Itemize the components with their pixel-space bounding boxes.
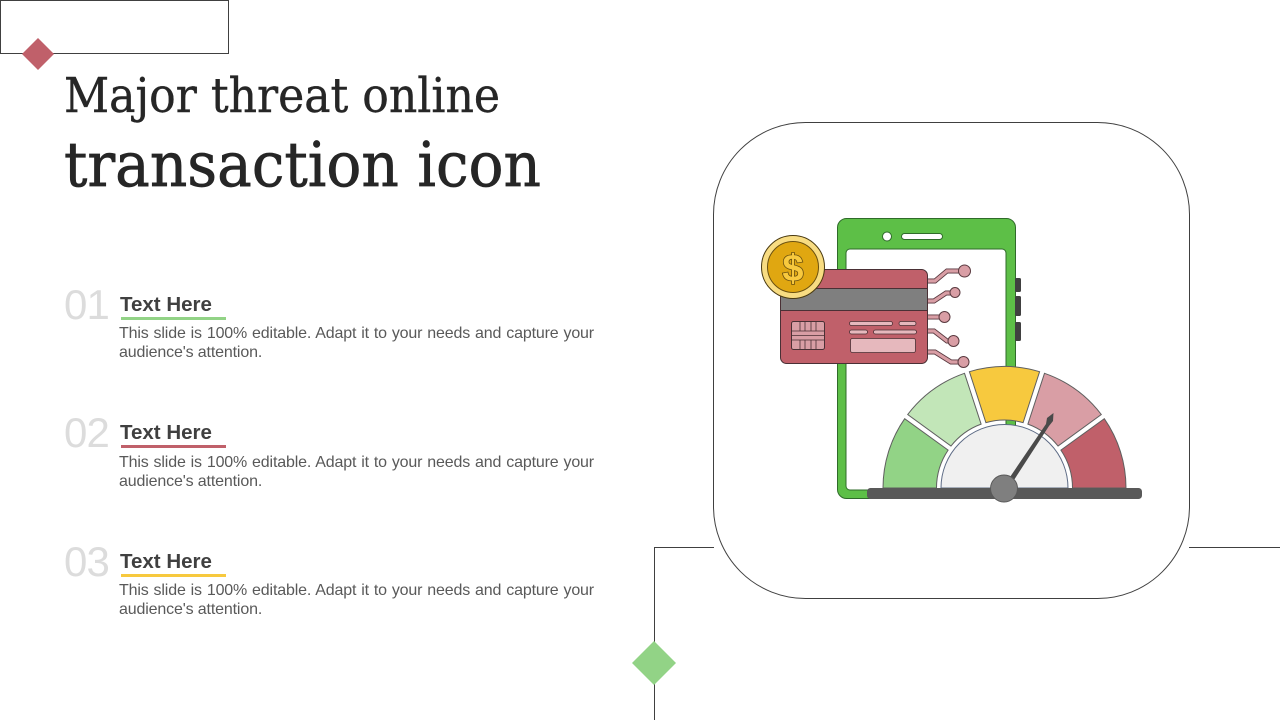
- number 03: 03: [64, 538, 109, 585]
- gauge segment: yellow: [969, 367, 1040, 423]
- title: [64, 68, 541, 201]
- heading 01: Text Here: [120, 293, 212, 316]
- card details: [850, 322, 916, 352]
- heading 03: Text Here: [120, 550, 212, 573]
- gauge needle: [1010, 413, 1054, 480]
- top-left frame: [0, 0, 228, 54]
- number 02: 02: [64, 409, 109, 456]
- body 01: This slide is 100% editable. Adapt it to your needs and capture your audience's attention.: [119, 325, 594, 361]
- gauge segment: light green: [908, 373, 981, 446]
- gauge segment: red: [1061, 419, 1126, 488]
- text item 02: [64, 409, 594, 490]
- icon: threat gauge: [867, 367, 1142, 502]
- icon: credit card: [780, 270, 928, 364]
- underline 01: [121, 317, 226, 320]
- red diamond: [22, 38, 54, 70]
- underline 03: [121, 574, 226, 577]
- text item 01: [64, 281, 594, 361]
- gauge hub: [990, 475, 1018, 502]
- title: Major threat online: [64, 68, 500, 124]
- heading 02: Text Here: [120, 421, 212, 444]
- gauge segment: pink: [1028, 373, 1101, 446]
- gauge segment: green: [883, 419, 948, 488]
- body 03: This slide is 100% editable. Adapt it to your needs and capture your audience's attention.: [119, 582, 594, 618]
- number 01: 01: [64, 281, 109, 328]
- gauge dial: [941, 424, 1068, 488]
- tile outline: [714, 122, 1190, 598]
- underline 02: [121, 445, 226, 448]
- icon: smartphone: [838, 218, 1021, 498]
- green diamond: [632, 641, 676, 685]
- text item 03: [64, 538, 594, 618]
- icon: circuit connectors: [928, 265, 970, 368]
- icon: dollar coin: [762, 236, 824, 298]
- card chip: [792, 322, 824, 350]
- icon: dollar coin: $: [782, 248, 804, 290]
- connector lines: [654, 548, 1280, 720]
- gauge base: [867, 488, 1142, 499]
- body 02: This slide is 100% editable. Adapt it to your needs and capture your audience's attention.: [119, 454, 594, 490]
